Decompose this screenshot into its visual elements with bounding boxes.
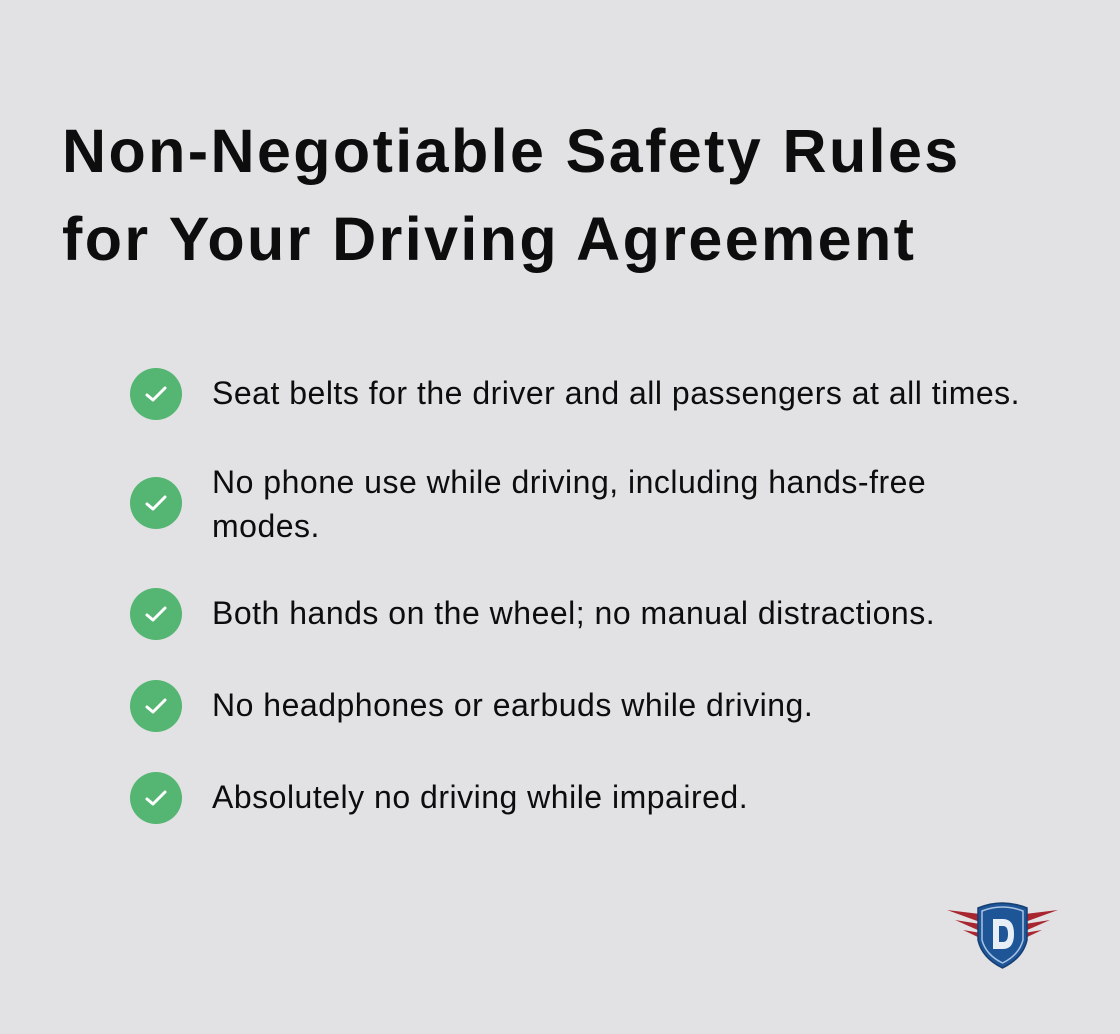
text: Both hands on the wheel; no manual distractions. bbox=[212, 595, 935, 631]
item 3 bbox=[130, 588, 935, 640]
item 4 bbox=[130, 680, 813, 732]
item 5 bbox=[130, 772, 748, 824]
text: Absolutely no driving while impaired. bbox=[212, 779, 748, 815]
icon: check bbox=[130, 772, 182, 824]
text: Seat belts for the driver and all passengers at all times. bbox=[212, 375, 1020, 411]
text bbox=[212, 464, 926, 544]
icon: check bbox=[130, 368, 182, 420]
text: modes. bbox=[212, 508, 320, 544]
text: No phone use while driving, including hands-free bbox=[212, 464, 926, 500]
title bbox=[62, 117, 961, 273]
title: Non-Negotiable Safety Rules bbox=[62, 117, 961, 185]
item 1 bbox=[130, 368, 1020, 420]
logo bbox=[947, 902, 1058, 969]
item 2 bbox=[130, 464, 926, 544]
icon: check bbox=[130, 477, 182, 529]
icon: check bbox=[130, 680, 182, 732]
icon: check bbox=[130, 588, 182, 640]
text: No headphones or earbuds while driving. bbox=[212, 687, 813, 723]
title: for Your Driving Agreement bbox=[62, 205, 916, 273]
